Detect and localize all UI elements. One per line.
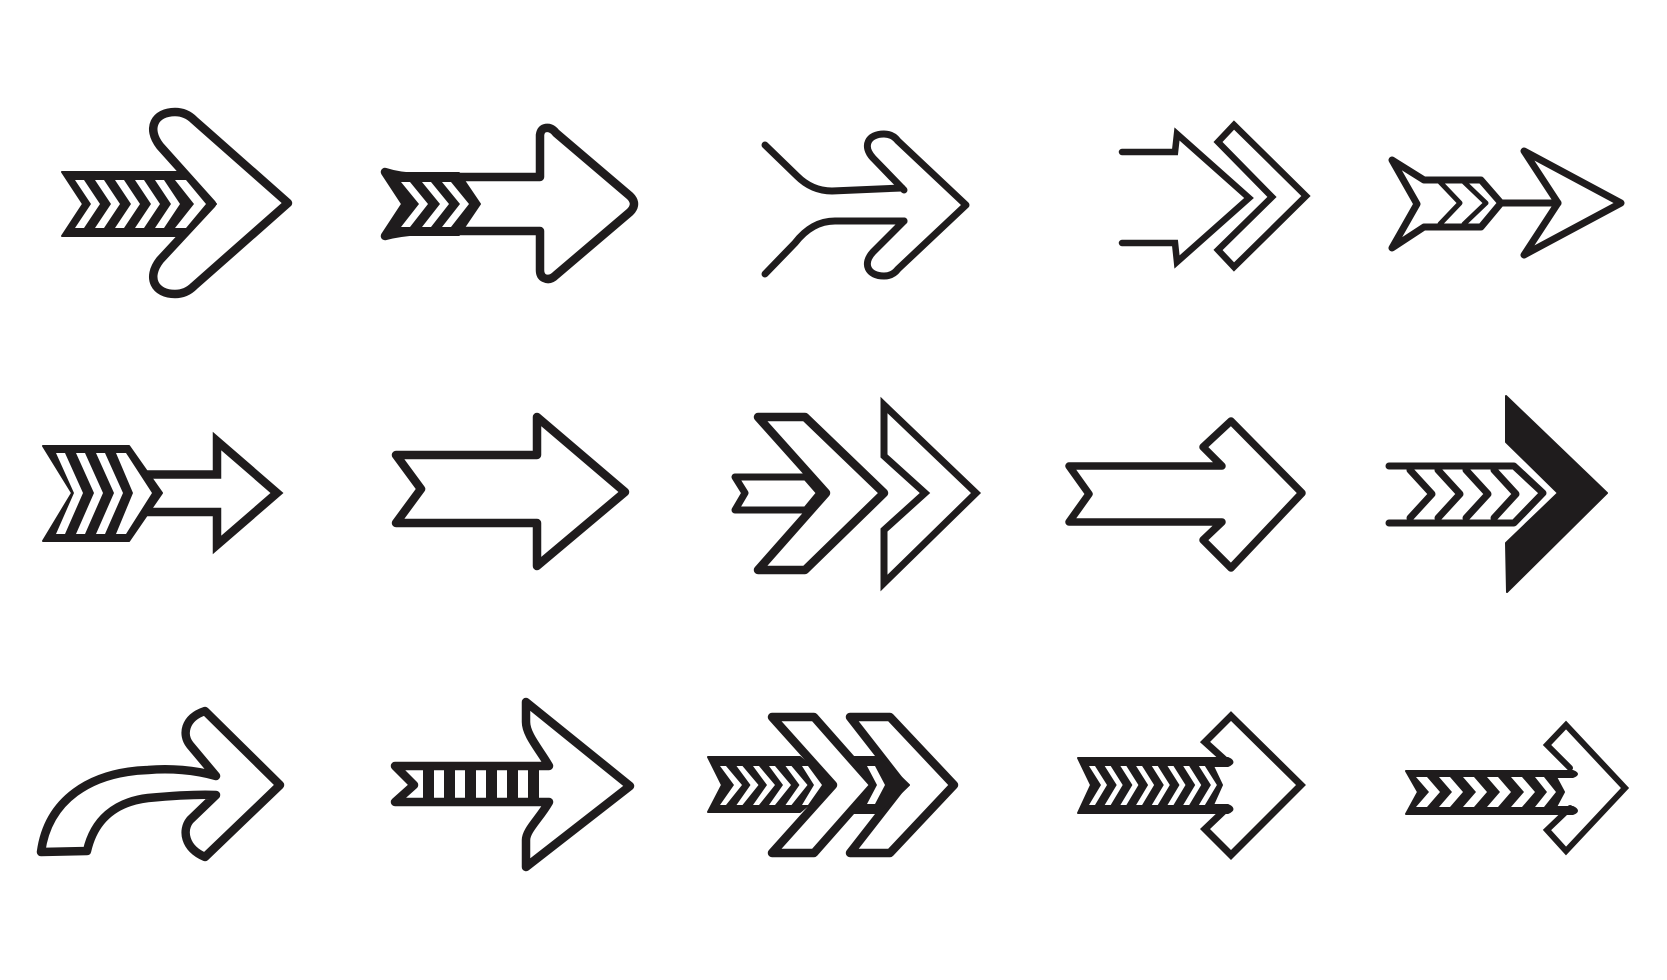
icon: arrow with solid black chevron head <box>1389 396 1607 592</box>
icon: double chevron arrow with short shaft <box>735 405 976 583</box>
icon: plain outlined arrow <box>396 417 625 566</box>
icon: small arrow with chevron shaft <box>1406 725 1625 851</box>
icon: straight arrow with short chevron fletch <box>385 128 634 279</box>
icon: arrow with wide striped fletch <box>43 441 277 545</box>
icon: arrow with ladder-rung shaft <box>395 702 630 867</box>
icon: double chevron arrow with striped shaft <box>708 717 954 853</box>
icon: rounded arrow with chevron shaft <box>62 112 288 294</box>
icon: thin arrow with fletching <box>1392 151 1621 255</box>
icon: merging curved-line arrow <box>765 134 966 276</box>
icon: curved bending arrow <box>41 711 280 857</box>
icon: open arrow with parallel chevron <box>1122 125 1306 267</box>
icon: arrow with dense chevron shaft <box>1078 716 1301 855</box>
icon: notched-tail block arrow <box>1069 421 1302 568</box>
